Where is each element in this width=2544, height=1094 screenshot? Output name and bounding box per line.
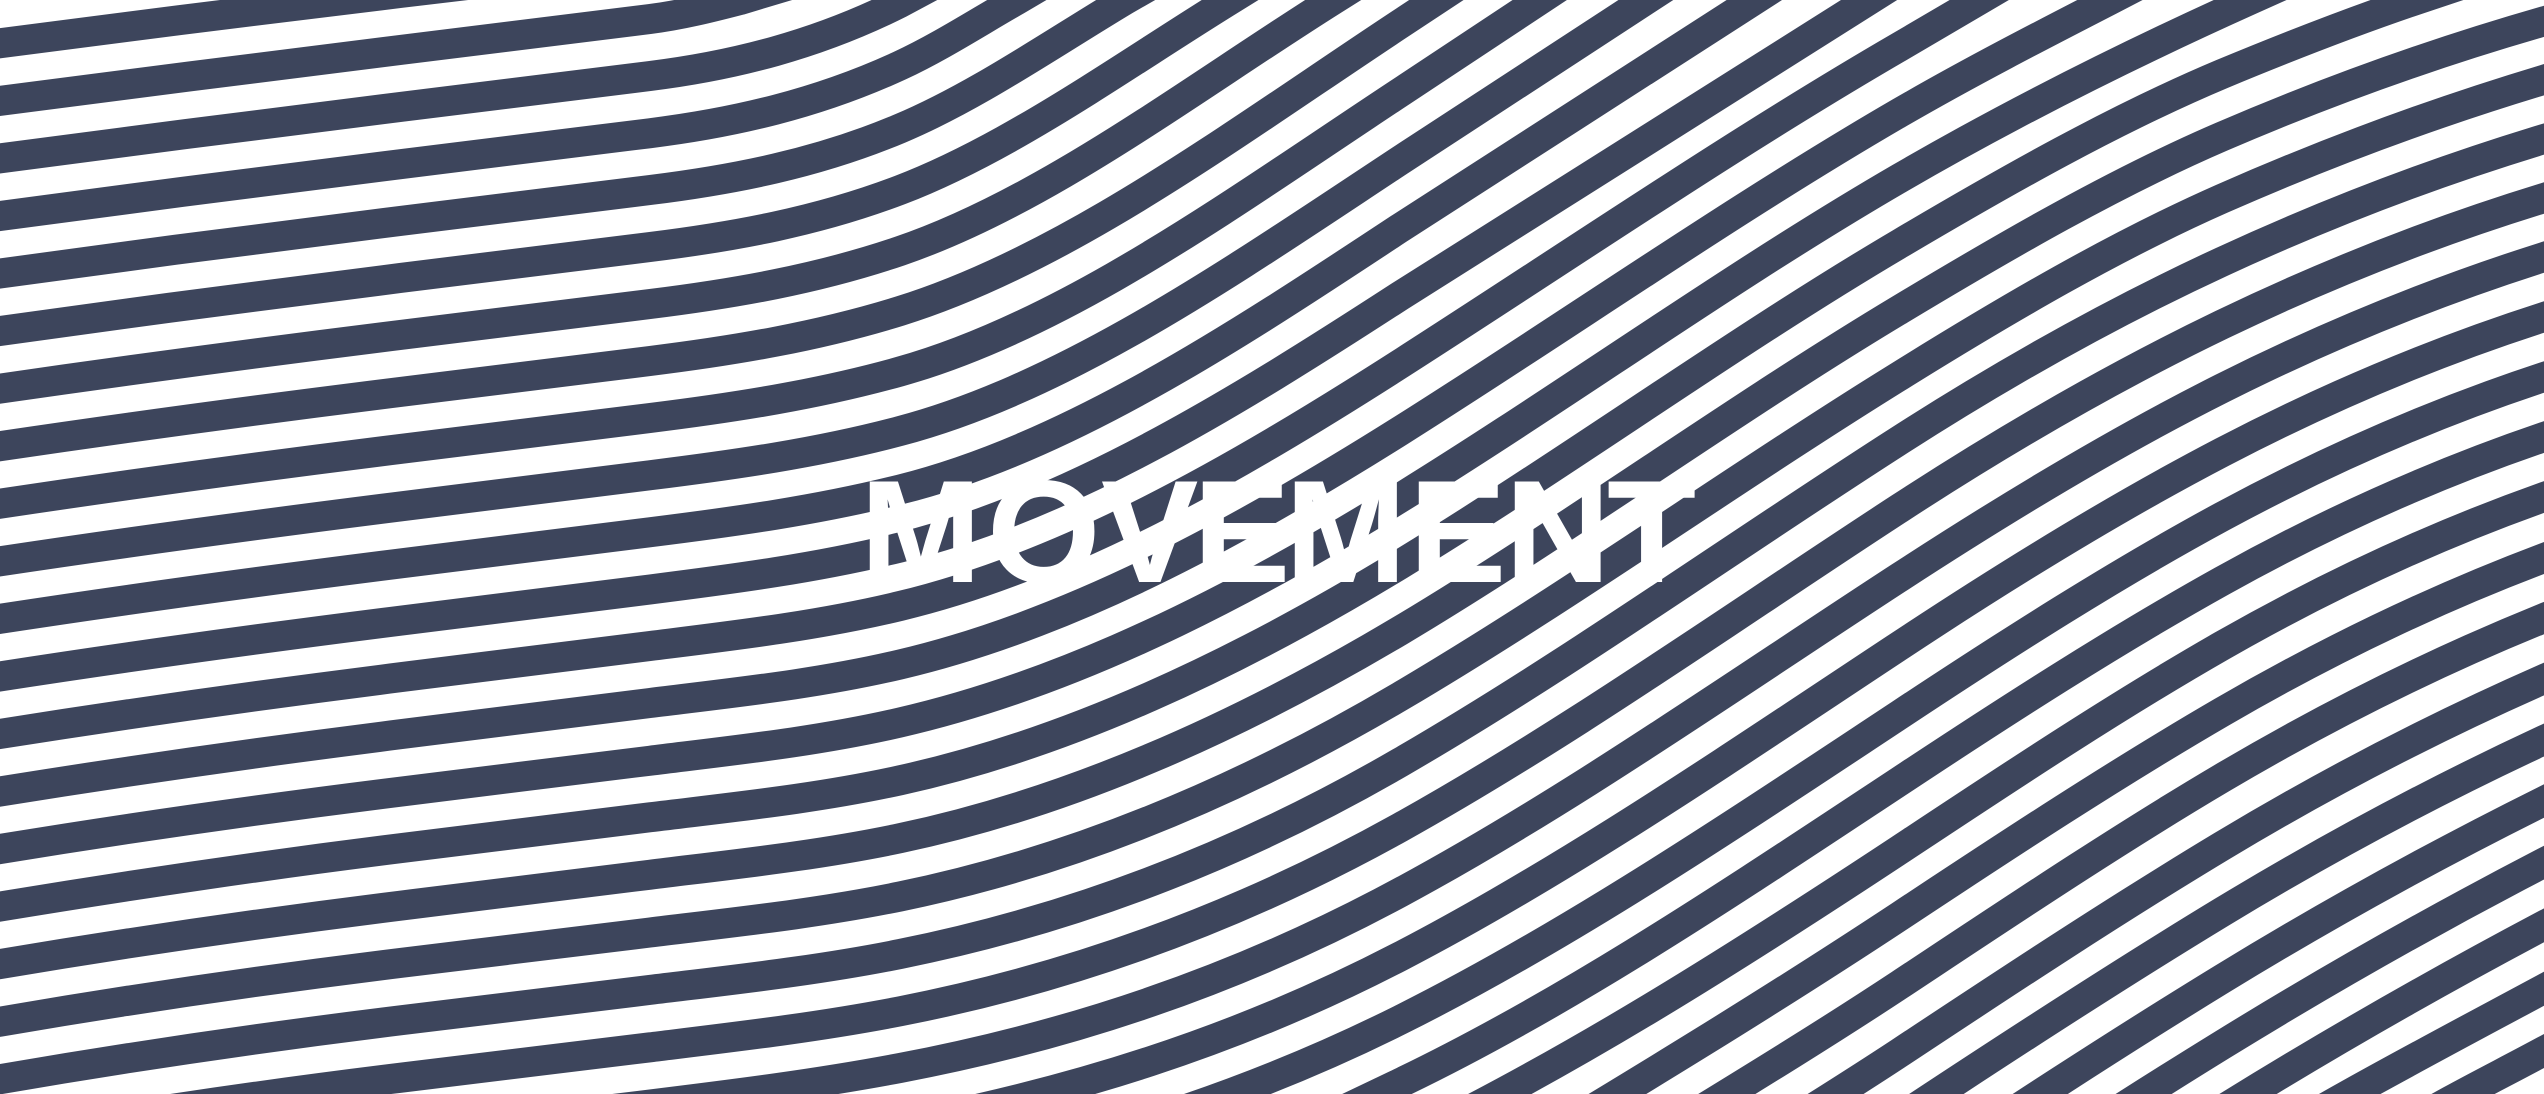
title: MOVEMENT: MOVEMENT bbox=[860, 450, 1696, 613]
